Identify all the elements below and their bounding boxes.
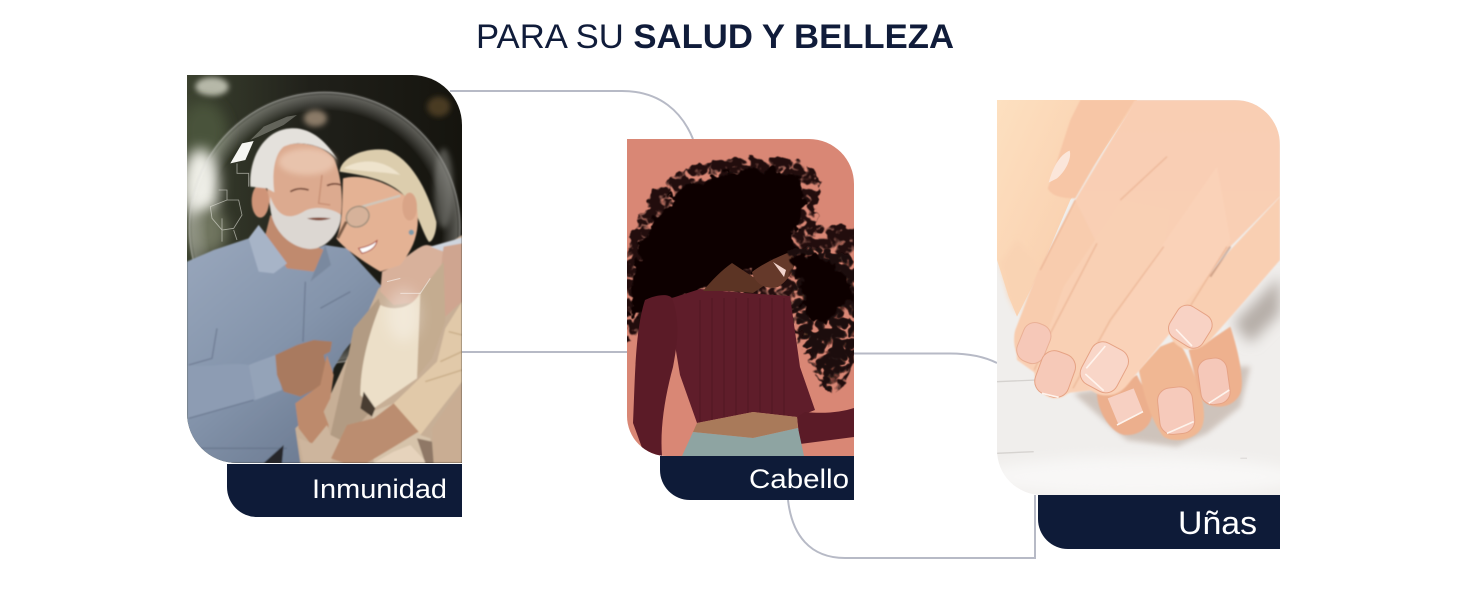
table shadow <box>1234 277 1280 343</box>
man head <box>267 143 342 243</box>
thumb <box>1048 100 1135 198</box>
left hand back <box>997 100 1137 317</box>
connector: inmunidad to cabello middle <box>462 351 627 353</box>
label: cabello <box>660 456 854 500</box>
midriff <box>693 412 798 438</box>
arm around <box>430 238 462 252</box>
panel: cabello photo <box>619 139 860 456</box>
upper nails <box>1016 322 1052 364</box>
woman neck <box>380 245 447 305</box>
hair mass <box>631 170 805 320</box>
label: uñas: Uñas <box>1178 505 1257 541</box>
right curls <box>790 248 860 392</box>
upper fingers <box>1014 197 1280 399</box>
back of upper hand <box>1015 100 1280 393</box>
man neck <box>265 215 327 272</box>
shirt <box>672 289 815 423</box>
connector: cabello to uñas bottom <box>788 495 1035 558</box>
title: PARA SU SALUD Y BELLEZA <box>476 18 954 56</box>
neck and face <box>703 263 765 293</box>
hair wisps <box>619 157 860 393</box>
panel: uñas photo <box>997 100 1280 495</box>
icon: protective bubble <box>189 92 461 364</box>
woman body base <box>295 235 462 463</box>
panel: inmunidad photo <box>180 75 462 463</box>
woman cardigan <box>330 298 380 442</box>
label: uñas <box>1038 495 1280 549</box>
woman face <box>336 177 418 272</box>
jeans <box>682 428 804 456</box>
label: inmunidad: Inmunidad <box>312 474 447 504</box>
lower fingers <box>1097 327 1242 440</box>
connector: cabello to uñas middle <box>854 354 997 363</box>
woman hair <box>340 149 436 242</box>
label: cabello: Cabello <box>749 464 849 494</box>
man shirt <box>187 225 384 463</box>
clasped hands <box>275 340 332 397</box>
connector: inmunidad to cabello top <box>450 91 693 139</box>
lower nails <box>1108 388 1143 425</box>
label: inmunidad <box>227 464 462 517</box>
